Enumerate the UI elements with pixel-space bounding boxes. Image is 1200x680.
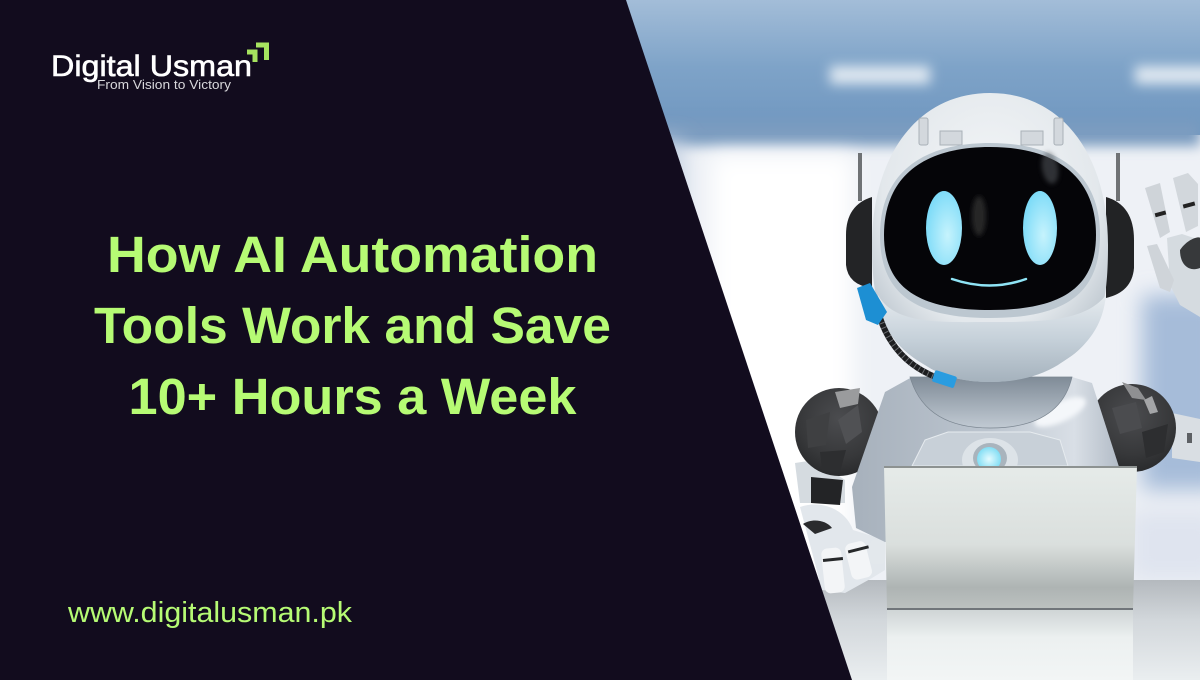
laptop [884, 466, 1137, 610]
left headphone [846, 153, 872, 288]
title: 10+ Hours a Week [128, 368, 577, 425]
title: How AI Automation [107, 226, 598, 283]
left eye [926, 191, 962, 265]
left hand on laptop [800, 505, 885, 594]
dark diagonal panel [0, 0, 852, 680]
right eye [1023, 191, 1057, 265]
left arm [795, 460, 845, 505]
robot [795, 93, 1200, 594]
title: Tools Work and Save [94, 297, 611, 354]
laptop reflection on table [887, 610, 1133, 680]
right shoulder sphere [1088, 382, 1176, 472]
right arm raised [1145, 173, 1200, 462]
logo arrows icon [247, 45, 266, 62]
logo wordmark: Digital Usman [51, 50, 252, 83]
neck collar [910, 377, 1072, 428]
helmet shell [872, 93, 1108, 382]
helmet vents [919, 118, 1063, 145]
visor screen [884, 147, 1096, 310]
photo background: blurred office [600, 0, 1200, 680]
helmet chin band [878, 295, 1106, 382]
smile [952, 279, 1026, 286]
torso highlight [1030, 391, 1090, 433]
visor frame [880, 143, 1100, 318]
logo tagline: From Vision to Victory [97, 78, 232, 92]
nose glow [972, 196, 986, 236]
chest panel [912, 432, 1068, 466]
visor reflection [1039, 151, 1061, 185]
chest light [962, 438, 1018, 482]
right headphone [1106, 153, 1134, 298]
title [94, 226, 611, 425]
logo [51, 45, 266, 92]
left shoulder sphere [795, 388, 883, 476]
torso [852, 377, 1130, 542]
table surface [760, 580, 1200, 680]
website url: www.digitalusman.pk [67, 597, 353, 629]
microphone boom [857, 283, 957, 388]
